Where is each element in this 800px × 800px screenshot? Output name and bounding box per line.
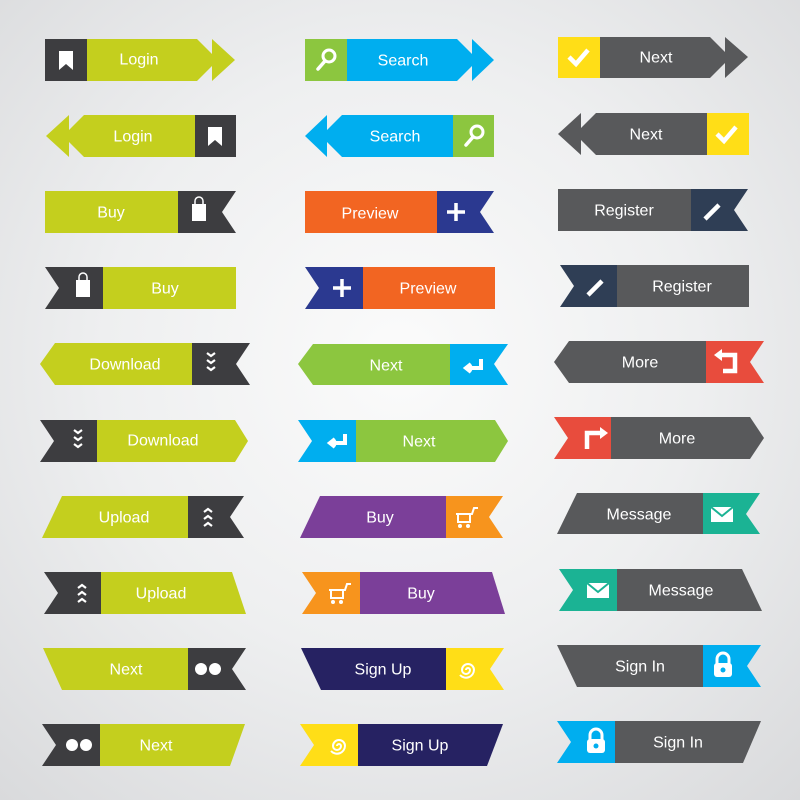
button: Search right xyxy=(305,39,494,81)
button: Buy purple right xyxy=(300,496,503,538)
button: Register left xyxy=(560,265,749,307)
button: Next left dots: Next xyxy=(140,738,173,754)
button: Login left: Login xyxy=(113,128,153,146)
button: Sign In left: Sign In xyxy=(653,734,703,752)
button: Next right dots xyxy=(43,648,246,690)
button: Buy left: Buy xyxy=(151,280,179,298)
button: Next left dots xyxy=(42,724,245,766)
button: Preview left xyxy=(305,267,495,309)
button: More right: More xyxy=(622,354,658,372)
button: Sign Up left xyxy=(300,724,503,766)
button: Preview right: Preview xyxy=(342,206,399,222)
button: Message left xyxy=(559,569,762,611)
button: More left xyxy=(554,417,764,459)
button: Download left: Download xyxy=(127,432,199,450)
button: Register right: Register xyxy=(594,202,654,220)
button: More right xyxy=(554,341,764,383)
button: Message left: Message xyxy=(649,582,714,600)
button: More left: More xyxy=(659,430,695,448)
button: Register left: Register xyxy=(652,278,712,296)
button: Buy purple right: Buy xyxy=(366,510,394,526)
button: Search right: Search xyxy=(378,52,428,70)
button: Next green right xyxy=(298,344,508,385)
button: Sign Up right xyxy=(301,648,504,690)
button: Sign Up left: Sign Up xyxy=(392,738,449,754)
button: Message right: Message xyxy=(607,506,672,524)
button: Login right: Login xyxy=(119,52,159,68)
button: Upload right: Upload xyxy=(99,510,149,526)
button: Sign Up right: Sign Up xyxy=(355,662,412,678)
button: Next gray right xyxy=(558,37,748,78)
button: Register right xyxy=(558,189,748,231)
button: Buy purple left xyxy=(302,572,505,614)
column 2 buttons xyxy=(298,39,508,766)
button: Next green left xyxy=(298,420,508,462)
button: Next gray left xyxy=(558,113,749,155)
button: Upload left: Upload xyxy=(136,586,186,602)
button: Search left xyxy=(305,115,494,157)
button: Buy purple left: Buy xyxy=(407,586,435,602)
button: Next green right: Next xyxy=(370,358,403,374)
button: Download left xyxy=(40,420,248,462)
button: Search left: Search xyxy=(370,128,420,146)
column 3 buttons xyxy=(554,37,764,763)
button: Next gray right: Next xyxy=(640,50,673,66)
button: Download right xyxy=(40,343,250,385)
button: Upload right xyxy=(42,496,244,538)
button: Next right dots: Next xyxy=(110,662,143,678)
button: Upload left xyxy=(44,572,246,614)
button: Download right: Download xyxy=(89,356,161,374)
button: Sign In left xyxy=(557,721,761,763)
button: Message right xyxy=(557,493,760,534)
button: Buy right: Buy xyxy=(97,204,125,222)
button: Login right xyxy=(45,39,235,81)
button: Sign In right xyxy=(557,645,761,687)
button: Next gray left: Next xyxy=(630,126,663,144)
button: Sign In right: Sign In xyxy=(615,658,665,676)
button: Buy left xyxy=(45,267,236,309)
column 1 buttons xyxy=(40,39,250,766)
button: Login left xyxy=(46,115,236,157)
button: Preview left: Preview xyxy=(400,280,457,298)
button: Next green left: Next xyxy=(403,434,436,450)
button: Preview right xyxy=(305,191,494,233)
button: Buy right xyxy=(45,191,236,233)
